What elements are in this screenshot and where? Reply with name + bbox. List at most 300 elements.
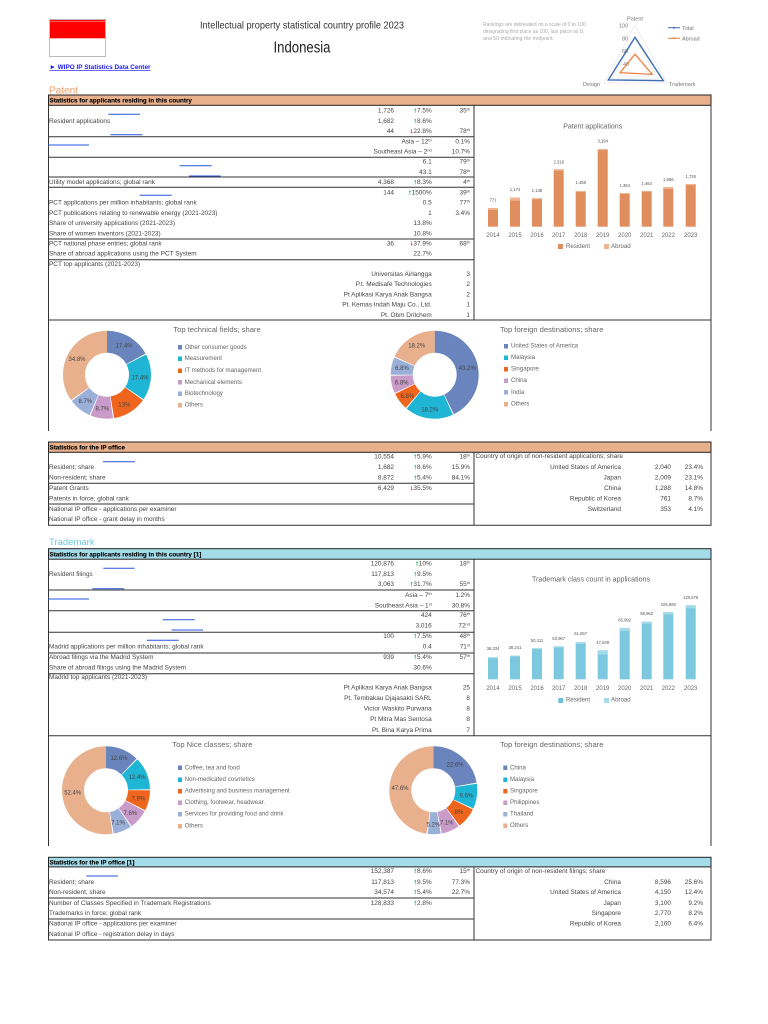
trademark applicant rows: th xyxy=(467,580,470,585)
trademark office rows: 12.4% xyxy=(685,889,703,896)
trademark applicant rows: th xyxy=(467,653,470,658)
trademark applicant rows: 424 xyxy=(421,612,432,619)
patent applicant rows: Share of abroad applications using the PCT System xyxy=(49,250,197,258)
bar chart: patent applications: Resident xyxy=(566,243,590,250)
trademark applicant rows: st xyxy=(467,643,471,648)
donut chart: trademark foreign destinations: Top foreign destinations; share xyxy=(500,740,603,749)
rankings note: Rankings are delineated on a scale of 0 to 100, xyxy=(483,22,587,28)
patent office rows: 2,040 xyxy=(655,464,671,471)
bar chart: patent applications: 1,464 xyxy=(641,181,653,186)
bar chart: patent applications: 3,194 xyxy=(597,138,609,144)
donut chart: top Nice classes: Top Nice classes; share xyxy=(172,740,253,749)
patent office rows: 1,682 xyxy=(378,464,394,471)
patent office rows: United States of America xyxy=(550,464,621,471)
bar chart: trademark class count: 120,876 xyxy=(683,595,699,600)
patent applicant rows: nd xyxy=(427,148,432,153)
donut chart: trademark foreign destinations: Malaysia xyxy=(510,776,535,783)
trademark office header: Statistics for the IP office [1] xyxy=(50,860,134,867)
patent section header: Statistics for applicants residing in this country xyxy=(50,98,192,105)
bar chart: trademark class count: 2020 xyxy=(618,686,632,692)
donut chart: patent foreign destinations: India xyxy=(511,389,525,396)
trademark office rows: 2,770 xyxy=(655,910,671,917)
bar chart: patent applications: 771 xyxy=(490,198,497,202)
patent applicant rows: 4 xyxy=(463,179,467,186)
trademark office rows: ↑2.8% xyxy=(414,900,432,907)
bar chart: trademark class count: 105,869 xyxy=(661,602,677,607)
radar chart: 40 xyxy=(623,62,629,68)
radar chart: Patent xyxy=(627,16,643,22)
patent office rows: ↑8.6% xyxy=(414,464,432,471)
patent applicant rows: 2 xyxy=(466,291,470,298)
donut chart: top technical fields: Biotechnology xyxy=(185,390,224,397)
donut chart: patent foreign destinations: Top foreign destinations; share xyxy=(500,325,603,334)
trademark office rows: 9.2% xyxy=(688,900,703,907)
bar chart: patent applications: 1,138 xyxy=(532,188,543,193)
donut chart: top Nice classes: 7.6% xyxy=(123,811,138,817)
heading: Patent: Patent xyxy=(49,86,78,96)
patent applicant rows: 79 xyxy=(459,158,467,166)
donut chart: top technical fields: Top technical fields; share xyxy=(173,325,261,334)
donut chart: top technical fields: 8.7% xyxy=(95,406,110,412)
radar chart: Total xyxy=(682,26,694,32)
trademark applicant rows: 18 xyxy=(459,560,467,568)
donut chart: trademark foreign destinations: 7.1% xyxy=(440,820,454,826)
heading: Trademark: Trademark xyxy=(49,537,95,548)
trademark applicant rows: Share of abroad filings using the Madrid System xyxy=(49,665,186,672)
bar chart: patent applications: 2016 xyxy=(530,233,544,239)
panel: patent IP office statistics xyxy=(48,442,711,525)
donut chart: trademark foreign destinations: 8% xyxy=(455,810,464,816)
patent office rows: 14.8% xyxy=(685,485,703,492)
patent applicant rows: PCT national phase entries; global rank xyxy=(49,240,162,247)
patent applicant rows: 10.8% xyxy=(413,230,432,237)
trademark applicant rows: 3,063 xyxy=(378,581,394,588)
patent applicant rows: 22.7% xyxy=(413,250,432,258)
patent applicant rows: 3 xyxy=(466,271,470,278)
patent office rows: 353 xyxy=(660,506,671,513)
bar chart: patent applications: 2023 xyxy=(684,233,698,239)
patent applicant rows: PCT applications per million inhabitants; global rank xyxy=(49,200,197,207)
trademark office rows: Republic of Korea xyxy=(570,920,621,928)
trademark applicant rows: 3,016 xyxy=(416,623,432,630)
trademark applicant rows: 7 xyxy=(466,727,470,734)
patent office rows: ↓35.5% xyxy=(410,485,432,492)
patent applicant rows: th xyxy=(428,137,432,142)
patent applicant rows: ↑8.3% xyxy=(414,179,432,186)
patent applicant rows: 10.7% xyxy=(452,149,470,156)
patent applicant rows: P.t. Medisafe Technologies xyxy=(356,281,432,288)
donut chart: top technical fields: Mechanical elements xyxy=(185,379,242,386)
patent office rows: Patent Grants xyxy=(49,485,89,492)
donut chart: top technical fields: 13% xyxy=(118,402,131,408)
bar chart: patent applications: 2018 xyxy=(574,233,588,239)
trademark applicant rows: Madrid top applicants (2021-2023) xyxy=(49,674,147,681)
trademark office rows: Singapore xyxy=(592,910,621,917)
trademark office rows: 8,596 xyxy=(655,879,671,886)
donut chart: top Nice classes: 7.9% xyxy=(131,796,146,802)
patent applicant rows: 68 xyxy=(459,240,467,247)
patent office rows: th xyxy=(467,452,470,458)
radar chart xyxy=(583,16,700,88)
patent office rows: ↑5.4% xyxy=(414,474,432,482)
donut chart: top technical fields: Other consumer goods xyxy=(185,344,247,351)
trademark office rows: 34,574 xyxy=(374,889,394,896)
donut chart: top Nice classes: Others xyxy=(185,822,203,829)
patent office rows: 84.1% xyxy=(452,474,470,482)
trademark applicant rows: ↑31.7% xyxy=(410,581,432,588)
trademark applicant rows: ↑7.5% xyxy=(414,633,432,640)
donut chart: top technical fields: Others xyxy=(185,401,203,408)
patent applicant rows: 2 xyxy=(466,281,470,288)
donut chart: patent foreign destinations: 43.2% xyxy=(459,366,476,372)
bar chart: trademark class count: 2019 xyxy=(596,686,610,692)
trademark office rows: National IP office - registration delay in days xyxy=(49,931,174,938)
trademark applicant rows: 0.4 xyxy=(423,644,432,651)
donut chart: patent foreign destinations: Singapore xyxy=(511,365,539,372)
bar chart: trademark class count: 85,992 xyxy=(618,618,632,622)
donut chart: top Nice classes: 12.6% xyxy=(110,756,128,762)
bar chart: patent applications: 1,364 xyxy=(619,183,631,188)
trademark office rows: 128,833 xyxy=(371,900,394,907)
donut chart: trademark foreign destinations: Thailand xyxy=(510,810,533,817)
trademark applicant rows: ↑5.4% xyxy=(414,654,432,661)
donut chart: trademark foreign destinations: 9.6% xyxy=(459,793,474,799)
donut chart: top technical fields: 17.4% xyxy=(115,343,133,349)
patent applicant rows: 1,682 xyxy=(378,118,394,125)
trademark office rows: Resident; share xyxy=(49,879,95,886)
trademark section header xyxy=(48,549,711,559)
trademark applicant rows: 48 xyxy=(459,633,467,640)
donut chart: trademark foreign destinations: Singapore xyxy=(510,787,538,794)
trademark applicant rows: 57 xyxy=(459,654,467,661)
bar chart: trademark class count: 96,962 xyxy=(640,611,654,616)
trademark office rows: 77.3% xyxy=(452,879,470,886)
trademark applicant rows: nd xyxy=(466,622,470,627)
patent applicant rows: Share of women inventors (2021-2023) xyxy=(49,230,161,237)
trademark office rows: 4,150 xyxy=(655,889,671,896)
trademark office rows: United States of America xyxy=(550,889,621,896)
patent applicant rows: 44 xyxy=(387,128,394,135)
radar chart: 80 xyxy=(622,36,628,42)
patent applicant rows: Pt. Kemas Indah Maju Co., Ltd. xyxy=(342,302,432,309)
patent applicant rows: 39 xyxy=(459,189,467,196)
trademark applicant rows: Resident filings xyxy=(49,571,93,578)
patent applicant rows: 0.5 xyxy=(423,200,432,207)
patent office rows: 1,288 xyxy=(655,485,671,492)
donut chart: top Nice classes: Services for providing food and drink xyxy=(185,810,285,817)
patent applicant rows: Utility model applications; global rank xyxy=(49,179,156,186)
patent office rows xyxy=(49,452,703,523)
trademark section header: Statistics for applicants residing in this country [1] xyxy=(50,551,201,558)
patent office rows: Japan xyxy=(603,474,621,482)
patent office rows: 8.7% xyxy=(688,495,703,502)
bar chart: patent applications xyxy=(486,121,698,250)
donut chart: top Nice classes: Advertising and business management xyxy=(185,787,290,794)
bar chart: patent applications: 2014 xyxy=(486,233,500,239)
bar chart: trademark class count: 50,411 xyxy=(531,638,544,643)
patent applicant rows: ↓22.8% xyxy=(410,128,432,135)
patent applicant rows: th xyxy=(467,199,470,204)
trademark office rows: 2,160 xyxy=(655,920,671,928)
trademark applicant rows: 30.6% xyxy=(413,665,432,672)
patent office header xyxy=(48,442,711,452)
donut chart: trademark foreign destinations: Philippines xyxy=(510,799,539,806)
trademark applicant rows xyxy=(49,560,471,734)
bar chart: patent applications: 2021 xyxy=(640,233,654,239)
panel: patent applicant statistics xyxy=(48,95,711,431)
donut chart: top Nice classes: Clothing, footwear, headwear. xyxy=(185,799,265,806)
trademark applicant rows: 71 xyxy=(460,644,467,651)
trademark office rows: National IP office - applications per examiner xyxy=(49,920,177,928)
patent applicant rows: th xyxy=(467,239,470,244)
trademark office rows: 6.4% xyxy=(688,920,703,928)
trademark office rows: 152,387 xyxy=(371,868,394,875)
bar chart: trademark class count: 2015 xyxy=(508,686,522,692)
bar chart: trademark class count: 2014 xyxy=(486,686,500,692)
bar chart: patent applications: 1,686 xyxy=(663,177,674,182)
trademark applicant rows: 8 xyxy=(466,695,470,702)
bar chart: patent applications: Abroad xyxy=(611,243,631,250)
trademark applicant rows: Pt. Bina Karya Prima xyxy=(372,727,432,734)
trademark applicant rows: 30.8% xyxy=(452,603,470,610)
title: Intellectual property statistical country profile 2023 xyxy=(200,20,404,32)
patent applicant rows: ↓37.9% xyxy=(410,240,432,247)
bar chart: trademark class count: 2022 xyxy=(662,686,676,692)
patent applicant rows: 6.1 xyxy=(423,158,432,166)
trademark office rows: 8.2% xyxy=(688,910,703,917)
donut chart: top technical fields: 17.4% xyxy=(131,375,149,381)
trademark applicant rows: 25 xyxy=(463,685,470,692)
trademark office rows: th xyxy=(467,867,470,872)
patent applicant rows: th xyxy=(467,178,470,183)
patent applicant rows: Pt Aplikasi Karya Anak Bangsa xyxy=(344,291,432,298)
patent applicant rows: 0.1% xyxy=(455,138,470,145)
trademark applicant rows: ↑10% xyxy=(415,560,432,568)
bar chart: trademark class count: Resident xyxy=(566,697,590,704)
donut chart: trademark foreign destinations: 5.2% xyxy=(426,822,441,828)
trademark office rows xyxy=(49,867,703,938)
bar chart: patent applications: 2015 xyxy=(508,233,522,239)
patent applicant rows: ↑1500% xyxy=(408,189,432,196)
trademark office header xyxy=(48,857,711,867)
trademark office rows: ↑5.4% xyxy=(414,889,432,896)
patent section header xyxy=(48,95,711,105)
trademark applicant rows: th xyxy=(428,591,432,596)
trademark applicant rows: 117,813 xyxy=(371,571,394,578)
trademark office rows: Number of Classes Specified in Trademark Registrations xyxy=(49,900,211,907)
trademark office rows: 3,100 xyxy=(655,900,671,907)
donut chart: top technical fields xyxy=(68,325,261,412)
trademark applicant rows: st xyxy=(429,602,433,607)
trademark applicant rows: Madrid applications per million inhabitants; global rank xyxy=(49,644,204,651)
patent applicant rows: th xyxy=(467,158,470,162)
patent applicant rows: 36 xyxy=(387,240,394,247)
patent applicant rows: th xyxy=(467,106,470,112)
donut chart: patent foreign destinations: 18.2% xyxy=(408,343,426,349)
bar chart: patent applications: 2020 xyxy=(618,233,632,239)
trademark office rows: 25.6% xyxy=(685,879,703,886)
donut chart: patent foreign destinations: 6.8% xyxy=(400,394,415,400)
rankings note xyxy=(483,22,587,42)
radar chart: 100 xyxy=(619,24,628,30)
trademark applicant rows: Pt. Tembakau Djajasakti SARL xyxy=(344,695,432,702)
patent applicant rows: th xyxy=(467,168,470,173)
patent applicant rows: Pt. Obm Drilchem xyxy=(381,312,432,319)
patent office rows: 23.4% xyxy=(685,464,703,471)
patent office rows: 4.1% xyxy=(688,506,703,513)
trademark office rows: 22.7% xyxy=(452,889,470,896)
trademark office rows: ↑8.6% xyxy=(414,868,432,875)
patent office rows: 2,009 xyxy=(655,474,671,482)
patent applicant rows xyxy=(49,106,470,319)
bar chart: patent applications: 2019 xyxy=(596,233,610,239)
panel: trademark applicant statistics xyxy=(48,549,711,846)
bar chart: trademark class count: 2016 xyxy=(530,686,544,692)
radar chart: 60 xyxy=(622,49,628,55)
donut chart: patent foreign destinations xyxy=(395,325,603,413)
patent applicant rows: 77 xyxy=(459,200,467,207)
trademark applicant rows: Pt Aplikasi Karya Anak Bangsa xyxy=(344,685,432,692)
donut chart: top Nice classes: 7.1% xyxy=(111,820,125,826)
bar chart: trademark class count: 2017 xyxy=(552,686,566,692)
donut chart: top Nice classes: 12.4% xyxy=(128,775,146,781)
patent applicant rows: 1 xyxy=(466,302,470,309)
trademark applicant rows: 939 xyxy=(383,654,394,661)
donut chart: patent foreign destinations: 18.2% xyxy=(421,407,439,413)
trademark applicant rows: 8 xyxy=(466,706,470,713)
bar chart: patent applications: 1,174 xyxy=(510,187,521,192)
bar chart: trademark class count: 2023 xyxy=(684,686,698,692)
trademark applicant rows: 55 xyxy=(459,581,467,588)
patent applicant rows: 3.4% xyxy=(455,210,470,217)
patent office rows: National IP office - grant delay in months xyxy=(49,516,165,523)
patent applicant rows: 144 xyxy=(383,189,394,196)
trademark office rows: Trademarks in force; global rank xyxy=(49,910,142,917)
rankings note: designating first place as 100, last place as 0, xyxy=(483,29,584,35)
patent office rows: Patents in force; global rank xyxy=(49,495,130,502)
donut chart: top Nice classes: 52.4% xyxy=(64,790,82,796)
patent office rows: China xyxy=(604,485,621,492)
patent office rows: 761 xyxy=(660,495,671,502)
donut chart: top technical fields: Measurement xyxy=(185,355,222,362)
bar chart: trademark class count: 2018 xyxy=(574,686,588,692)
bar chart: trademark class count: Abroad xyxy=(611,697,631,704)
donut chart: top Nice classes: Non-medicated cosmetics xyxy=(185,776,255,783)
trademark applicant rows: Asia – 7 xyxy=(405,592,428,599)
trademark office rows: Japan xyxy=(603,900,621,907)
patent applicant rows: Universitas Airlangga xyxy=(371,271,432,278)
trademark applicant rows: Victor Waskito Purwana xyxy=(364,706,432,713)
patent office rows: Republic of Korea xyxy=(570,495,621,502)
patent applicant rows: Resident applications xyxy=(49,118,110,125)
bar chart: trademark class count: 38,241 xyxy=(509,645,522,650)
donut chart: top technical fields: IT methods for management xyxy=(185,367,261,374)
trademark applicant rows: 8 xyxy=(466,716,470,723)
bar chart: trademark class count: 36,334 xyxy=(487,646,500,651)
donut chart: patent foreign destinations: United States of America xyxy=(511,342,579,349)
patent office rows: 23.1% xyxy=(685,474,703,482)
patent applicant rows: Southeast Asia – 2 xyxy=(374,149,427,156)
patent applicant rows: th xyxy=(467,188,470,193)
patent applicant rows: 78 xyxy=(459,169,467,176)
patent office rows: Country of origin of non-resident applications; share xyxy=(476,453,623,460)
donut chart: trademark foreign destinations: Others xyxy=(510,822,528,829)
patent office rows: 6,429 xyxy=(378,485,394,492)
bar chart: patent applications: 2022 xyxy=(662,233,676,239)
trademark office rows: Non-resident; share xyxy=(49,889,106,896)
donut chart: patent foreign destinations: Others xyxy=(511,400,529,407)
trademark office rows: China xyxy=(604,879,621,886)
donut chart: patent foreign destinations: 6.8% xyxy=(395,366,409,372)
patent applicant rows: 13.8% xyxy=(413,220,432,227)
trademark applicant rows: 1.2% xyxy=(455,592,470,599)
trademark applicant rows: 76 xyxy=(459,612,467,619)
patent applicant rows: 1 xyxy=(428,210,432,217)
bar chart: trademark class count: 47,639 xyxy=(596,640,610,645)
trademark applicant rows: th xyxy=(467,560,470,564)
rankings note: and 50 indicating the midpoint. xyxy=(483,36,554,42)
bar chart: patent applications: 2017 xyxy=(552,233,566,239)
donut chart: trademark foreign destinations: China xyxy=(510,764,527,771)
patent office rows: Non-resident; share xyxy=(49,474,106,482)
trademark applicant rows: 120,876 xyxy=(371,560,394,568)
trademark applicant rows: 72 xyxy=(458,623,466,630)
patent applicant rows: ↑8.6% xyxy=(414,118,432,125)
patent applicant rows: 78 xyxy=(459,128,467,135)
link: data center: ► WIPO IP Statistics Data Center xyxy=(50,64,151,71)
donut chart: top Nice classes: Coffee, tea and food xyxy=(185,764,240,771)
bar chart: trademark class count: 61,657 xyxy=(574,631,588,636)
patent office rows: 15.9% xyxy=(452,464,470,471)
trademark applicant rows: th xyxy=(467,632,470,637)
donut chart: trademark foreign destinations: 22.6% xyxy=(446,762,464,768)
patent office rows: 18 xyxy=(459,454,467,460)
donut chart: patent foreign destinations: 6.8% xyxy=(395,380,409,386)
bar chart: trademark class count xyxy=(486,574,699,704)
panel: trademark IP office statistics xyxy=(48,857,711,940)
patent applicant rows: 1 xyxy=(466,312,470,319)
donut chart: trademark foreign destinations xyxy=(391,740,603,829)
trademark applicant rows: Pt Mitra Mas Sentosa xyxy=(370,716,432,723)
patent applicant rows: 4,368 xyxy=(378,179,394,186)
radar chart: Trademark xyxy=(669,82,696,88)
patent office rows: Switzerland xyxy=(588,506,621,513)
trademark applicant rows: th xyxy=(467,611,470,616)
bar chart: trademark class count: 2021 xyxy=(640,686,654,692)
donut chart: patent foreign destinations: Malaysia xyxy=(511,354,536,361)
donut chart: top technical fields: 34.8% xyxy=(68,357,86,363)
patent office rows: 8,872 xyxy=(378,474,394,482)
radar chart: Design xyxy=(583,82,600,88)
bar chart: patent applications: 1,726 xyxy=(685,174,697,179)
patent applicant rows: ↑7.5% xyxy=(414,108,432,114)
bar chart: patent applications: 2,318 xyxy=(553,160,565,164)
patent applicant rows: th xyxy=(467,127,470,132)
patent applicant rows: 43.1 xyxy=(419,169,432,176)
radar chart: Abroad xyxy=(682,36,700,42)
trademark applicant rows: ↑9.5% xyxy=(414,571,432,578)
patent applicant rows: PCT publications relating to renewable energy (2021-2023) xyxy=(49,210,217,217)
trademark office rows: ↑9.5% xyxy=(414,879,432,886)
patent applicant rows: 35 xyxy=(459,108,467,114)
bar chart: trademark class count: Trademark class count in applications xyxy=(532,574,650,583)
patent office rows: ↑5.9% xyxy=(414,454,432,460)
trademark applicant rows: 100 xyxy=(383,633,394,640)
patent office rows: National IP office - applications per examiner xyxy=(49,506,177,513)
donut chart: trademark foreign destinations: 47.6% xyxy=(391,786,409,792)
patent office rows: 10,554 xyxy=(374,454,394,460)
patent office header: Statistics for the IP office xyxy=(50,445,125,452)
